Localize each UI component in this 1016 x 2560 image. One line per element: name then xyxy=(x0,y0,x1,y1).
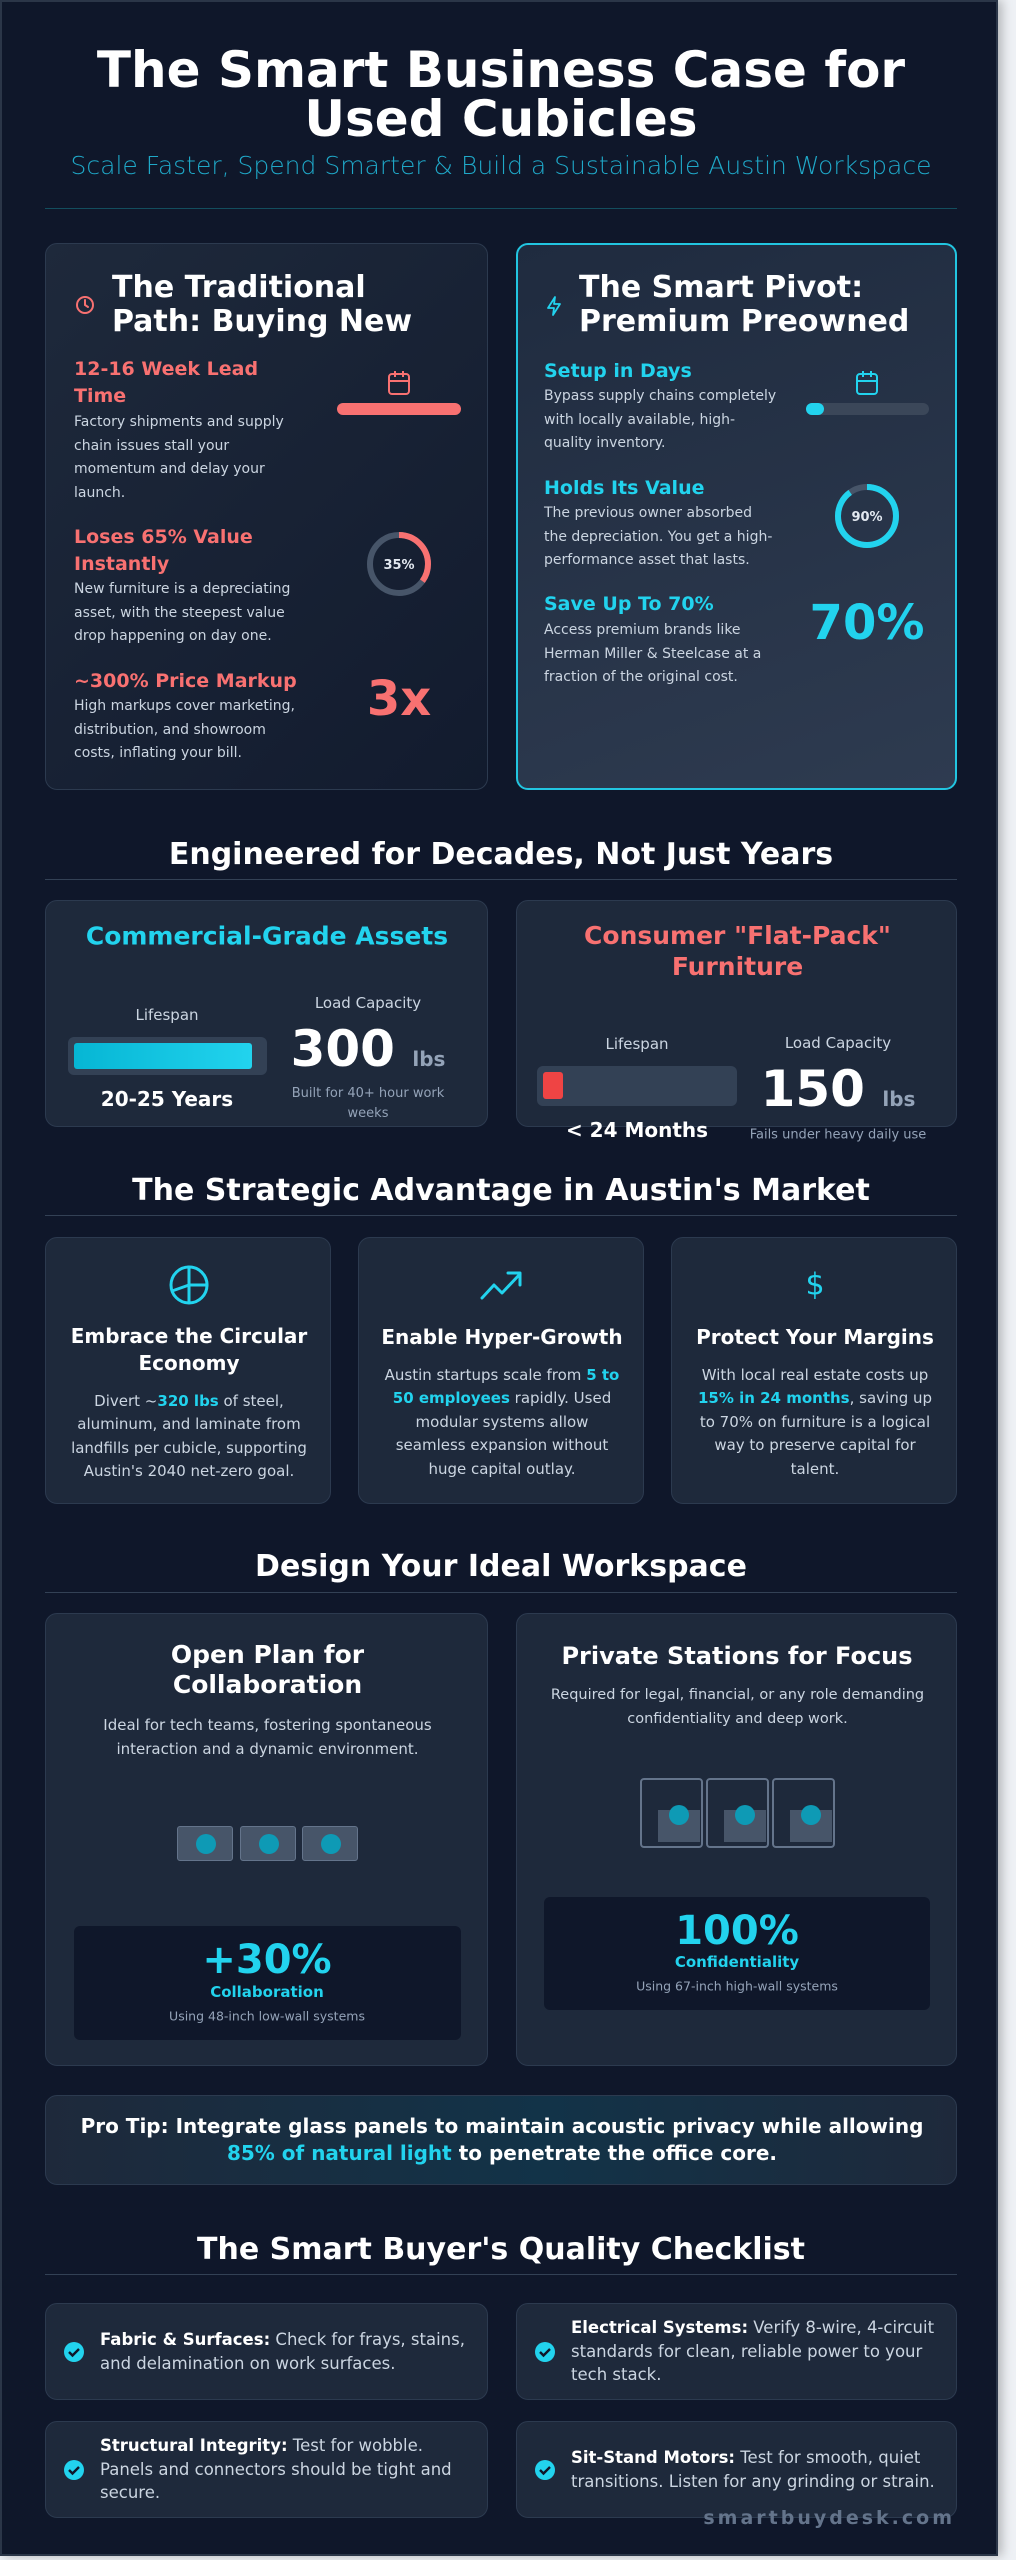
card: circular economy: Divert ~320 lbs of steel, xyxy=(94,1392,284,1410)
card: commercial grade: Commercial-Grade Assets xyxy=(86,922,448,950)
card: commercial grade: 20-25 Years xyxy=(101,1087,233,1111)
stat: 70%: 70% xyxy=(810,595,924,651)
bar: long lead xyxy=(337,403,461,415)
heading: checklist: The Smart Buyer's Quality Checklist xyxy=(197,2232,805,2267)
card: hyper growth: huge capital outlay. xyxy=(428,1460,576,1478)
checklist item: fabric: Fabric & Surfaces: Check for frays, stains, xyxy=(100,2330,465,2349)
card: open plan: Open Plan for xyxy=(171,1640,364,1669)
card: private stations: Private Stations for Focus xyxy=(561,1642,913,1670)
card: open plan: Collaboration xyxy=(173,1670,362,1699)
watermark: smartbuydesk.com xyxy=(703,2507,955,2529)
card: flat pack: Furniture xyxy=(672,952,803,981)
card: circular economy xyxy=(45,1237,331,1504)
panel: traditional path: asset, with the steepest value xyxy=(74,604,285,620)
item: loses value: Instantly xyxy=(74,553,169,575)
checklist item: motors xyxy=(516,2421,957,2518)
text: Fails under heavy daily use xyxy=(750,1128,926,1142)
subtitle: Scale Faster, Spend Smarter & Build a Sustainable Austin Workspace xyxy=(71,151,931,180)
panel: traditional path: New furniture is a depreciating xyxy=(74,581,290,597)
card: circular economy: aluminum, and laminate from xyxy=(77,1415,301,1433)
card: margins xyxy=(671,1237,957,1504)
card: hyper growth: seamless expansion without xyxy=(396,1436,608,1454)
card: flat pack: Lifespan xyxy=(605,1035,669,1053)
card: flat pack: 150 lbs xyxy=(761,1060,915,1118)
item: loses value xyxy=(74,526,253,575)
panel: smart pivot: Herman Miller & Steelcase at a xyxy=(544,646,761,662)
bar: short setup xyxy=(806,403,929,415)
heading: strategic advantage: The Strategic Advantage in Austin's Market xyxy=(132,1173,870,1208)
heading: design: Design Your Ideal Workspace xyxy=(255,1549,747,1584)
panel: traditional path xyxy=(45,243,488,790)
donut: 35%: 35% xyxy=(383,558,415,573)
checklist item: fabric xyxy=(45,2303,488,2400)
stat: 3x: 3x xyxy=(367,671,431,727)
item: lead time: Time xyxy=(74,385,126,407)
checklist item: structural xyxy=(45,2421,488,2518)
card: commercial grade xyxy=(45,900,488,1127)
stat: 100%: Using 67-inch high-wall systems xyxy=(636,1978,838,1994)
checklist item: motors: transitions. Listen for any grinding or strain. xyxy=(571,2472,935,2490)
card: hyper growth: modular systems allow xyxy=(416,1413,588,1431)
callout: pro tip xyxy=(45,2095,957,2185)
card: private stations: confidentiality and deep work. xyxy=(627,1711,848,1727)
card: hyper growth: Austin startups scale from 5 to xyxy=(385,1366,619,1384)
card: margins: With local real estate costs up xyxy=(702,1366,928,1384)
donut: 90% xyxy=(835,484,899,548)
icon: clock xyxy=(76,296,94,314)
heading: Premium Preowned xyxy=(579,304,909,339)
panel: traditional path: chain issues stall your xyxy=(74,438,229,454)
icon: high-wall cubicles xyxy=(640,1778,835,1848)
checklist item: motors: Sit-Stand Motors: Test for smooth, quiet xyxy=(571,2448,920,2467)
title: Used Cubicles xyxy=(304,90,698,148)
stat: 100%: Confidentiality xyxy=(675,1953,799,1971)
card: open plan xyxy=(45,1613,488,2066)
heading: The Traditional xyxy=(112,270,366,305)
heading: Path: Buying New xyxy=(112,304,412,339)
panel: smart pivot: quality inventory. xyxy=(544,435,665,451)
checklist item: electrical: standards for clean, reliable power to your xyxy=(571,2342,922,2361)
panel: smart pivot: with locally available, high- xyxy=(544,412,735,428)
item: holds value: Holds Its Value xyxy=(544,477,704,499)
card: commercial grade: Built for 40+ hour work xyxy=(292,1086,444,1101)
card: flat pack: Load Capacity xyxy=(785,1034,891,1052)
stat: +30% xyxy=(74,1926,461,2040)
card: margins: Protect Your Margins xyxy=(696,1325,934,1349)
panel: smart pivot: fraction of the original cost. xyxy=(544,669,738,685)
checklist item: electrical xyxy=(516,2303,957,2400)
card: flat pack xyxy=(516,900,957,1127)
panel: smart pivot: the depreciation. You get a high- xyxy=(544,528,772,544)
card: private stations xyxy=(516,1613,957,2066)
lifespan bar: Lifespan xyxy=(135,1006,199,1024)
card: commercial grade: 300 lbs xyxy=(291,1020,445,1078)
card: circular economy: Austin's 2040 net-zero goal. xyxy=(84,1462,294,1480)
card: circular economy: Embrace the Circular xyxy=(71,1324,307,1348)
item: markup: ~300% Price Markup xyxy=(74,670,297,692)
stat: 100% xyxy=(544,1897,930,2010)
icon: calendar xyxy=(388,371,410,395)
heading: The Smart Pivot: xyxy=(579,270,863,305)
card: open plan: Ideal for tech teams, fostering spontaneous xyxy=(103,1716,432,1734)
item: save: Save Up To 70% xyxy=(544,593,714,615)
panel: traditional path: momentum and delay your xyxy=(74,461,265,477)
panel: smart pivot: performance asset that lasts. xyxy=(544,552,750,568)
stat: +30%: Collaboration xyxy=(210,1983,324,2001)
item: lead time: 12-16 Week Lead xyxy=(74,358,258,380)
title xyxy=(97,41,905,148)
checklist item: structural: Structural Integrity: Test for wobble. xyxy=(100,2436,423,2455)
panel: traditional path: drop happening on day one. xyxy=(74,628,272,644)
checklist item: structural: secure. xyxy=(100,2483,160,2502)
panel: traditional path: launch. xyxy=(74,484,125,500)
card: flat pack: Consumer "Flat-Pack" xyxy=(584,921,891,950)
card: circular economy: landfills per cubicle, supporting xyxy=(71,1439,307,1457)
panel: traditional path: distribution, and showroom xyxy=(74,722,266,738)
card: margins: way to preserve capital for xyxy=(714,1436,916,1454)
card: margins: to 70% on furniture is a logical xyxy=(700,1413,930,1431)
card: hyper growth: Enable Hyper-Growth xyxy=(381,1325,623,1349)
item: loses value: Loses 65% Value xyxy=(74,526,253,548)
panel: smart pivot: Bypass supply chains completely xyxy=(544,388,776,404)
card: margins: $ xyxy=(805,1268,825,1302)
stat: +30%: +30% xyxy=(202,1937,332,1983)
panel: traditional path: Factory shipments and supply xyxy=(74,414,284,430)
heading xyxy=(112,270,412,339)
heading: engineered: Engineered for Decades, Not Just Years xyxy=(169,837,833,872)
load capacity: Load Capacity xyxy=(315,994,421,1012)
card: open plan: interaction and a dynamic environment. xyxy=(116,1740,419,1758)
checklist item: fabric: and delamination on work surfaces. xyxy=(100,2354,395,2372)
checklist item: electrical: Electrical Systems: Verify 8-wire, 4-circuit xyxy=(571,2318,934,2337)
panel: smart pivot: The previous owner absorbed xyxy=(544,505,752,521)
checklist item: structural: Panels and connectors should be tight and xyxy=(100,2460,452,2479)
card: private stations: Required for legal, financial, or any role demanding xyxy=(551,1687,924,1703)
panel: smart pivot xyxy=(516,243,957,790)
card: hyper growth: 50 employees rapidly. Used xyxy=(393,1389,611,1407)
card: commercial grade: weeks xyxy=(348,1106,388,1121)
card: circular economy: Economy xyxy=(138,1351,240,1375)
text: < 24 Months xyxy=(566,1118,708,1142)
stat: 100%: 100% xyxy=(675,1908,799,1954)
item: setup: Setup in Days xyxy=(544,360,692,382)
callout: pro tip: Pro Tip: Integrate glass panels to maintain acoustic privacy while allowing xyxy=(81,2114,923,2138)
panel: smart pivot: Access premium brands like xyxy=(544,622,741,638)
heading xyxy=(579,270,909,339)
stat: +30%: Using 48-inch low-wall systems xyxy=(169,2008,365,2024)
title: The Smart Business Case for xyxy=(97,41,905,99)
icon: low-wall cubicles xyxy=(177,1826,358,1861)
icon: lightning xyxy=(547,296,561,316)
card: margins: talent. xyxy=(791,1460,839,1478)
callout: pro tip: 85% of natural light to penetrate the office core. xyxy=(227,2141,777,2165)
item: lead time xyxy=(74,358,258,407)
donut: 90%: 90% xyxy=(851,510,883,525)
card: hyper growth xyxy=(358,1237,644,1504)
icon: calendar xyxy=(856,371,878,395)
panel: traditional path: High markups cover marketing, xyxy=(74,698,295,714)
panel: traditional path: costs, inflating your bill. xyxy=(74,745,242,761)
card: margins: 15% in 24 months, saving up xyxy=(698,1389,932,1407)
checklist item: electrical: tech stack. xyxy=(571,2365,661,2384)
donut: 35% xyxy=(367,532,431,596)
